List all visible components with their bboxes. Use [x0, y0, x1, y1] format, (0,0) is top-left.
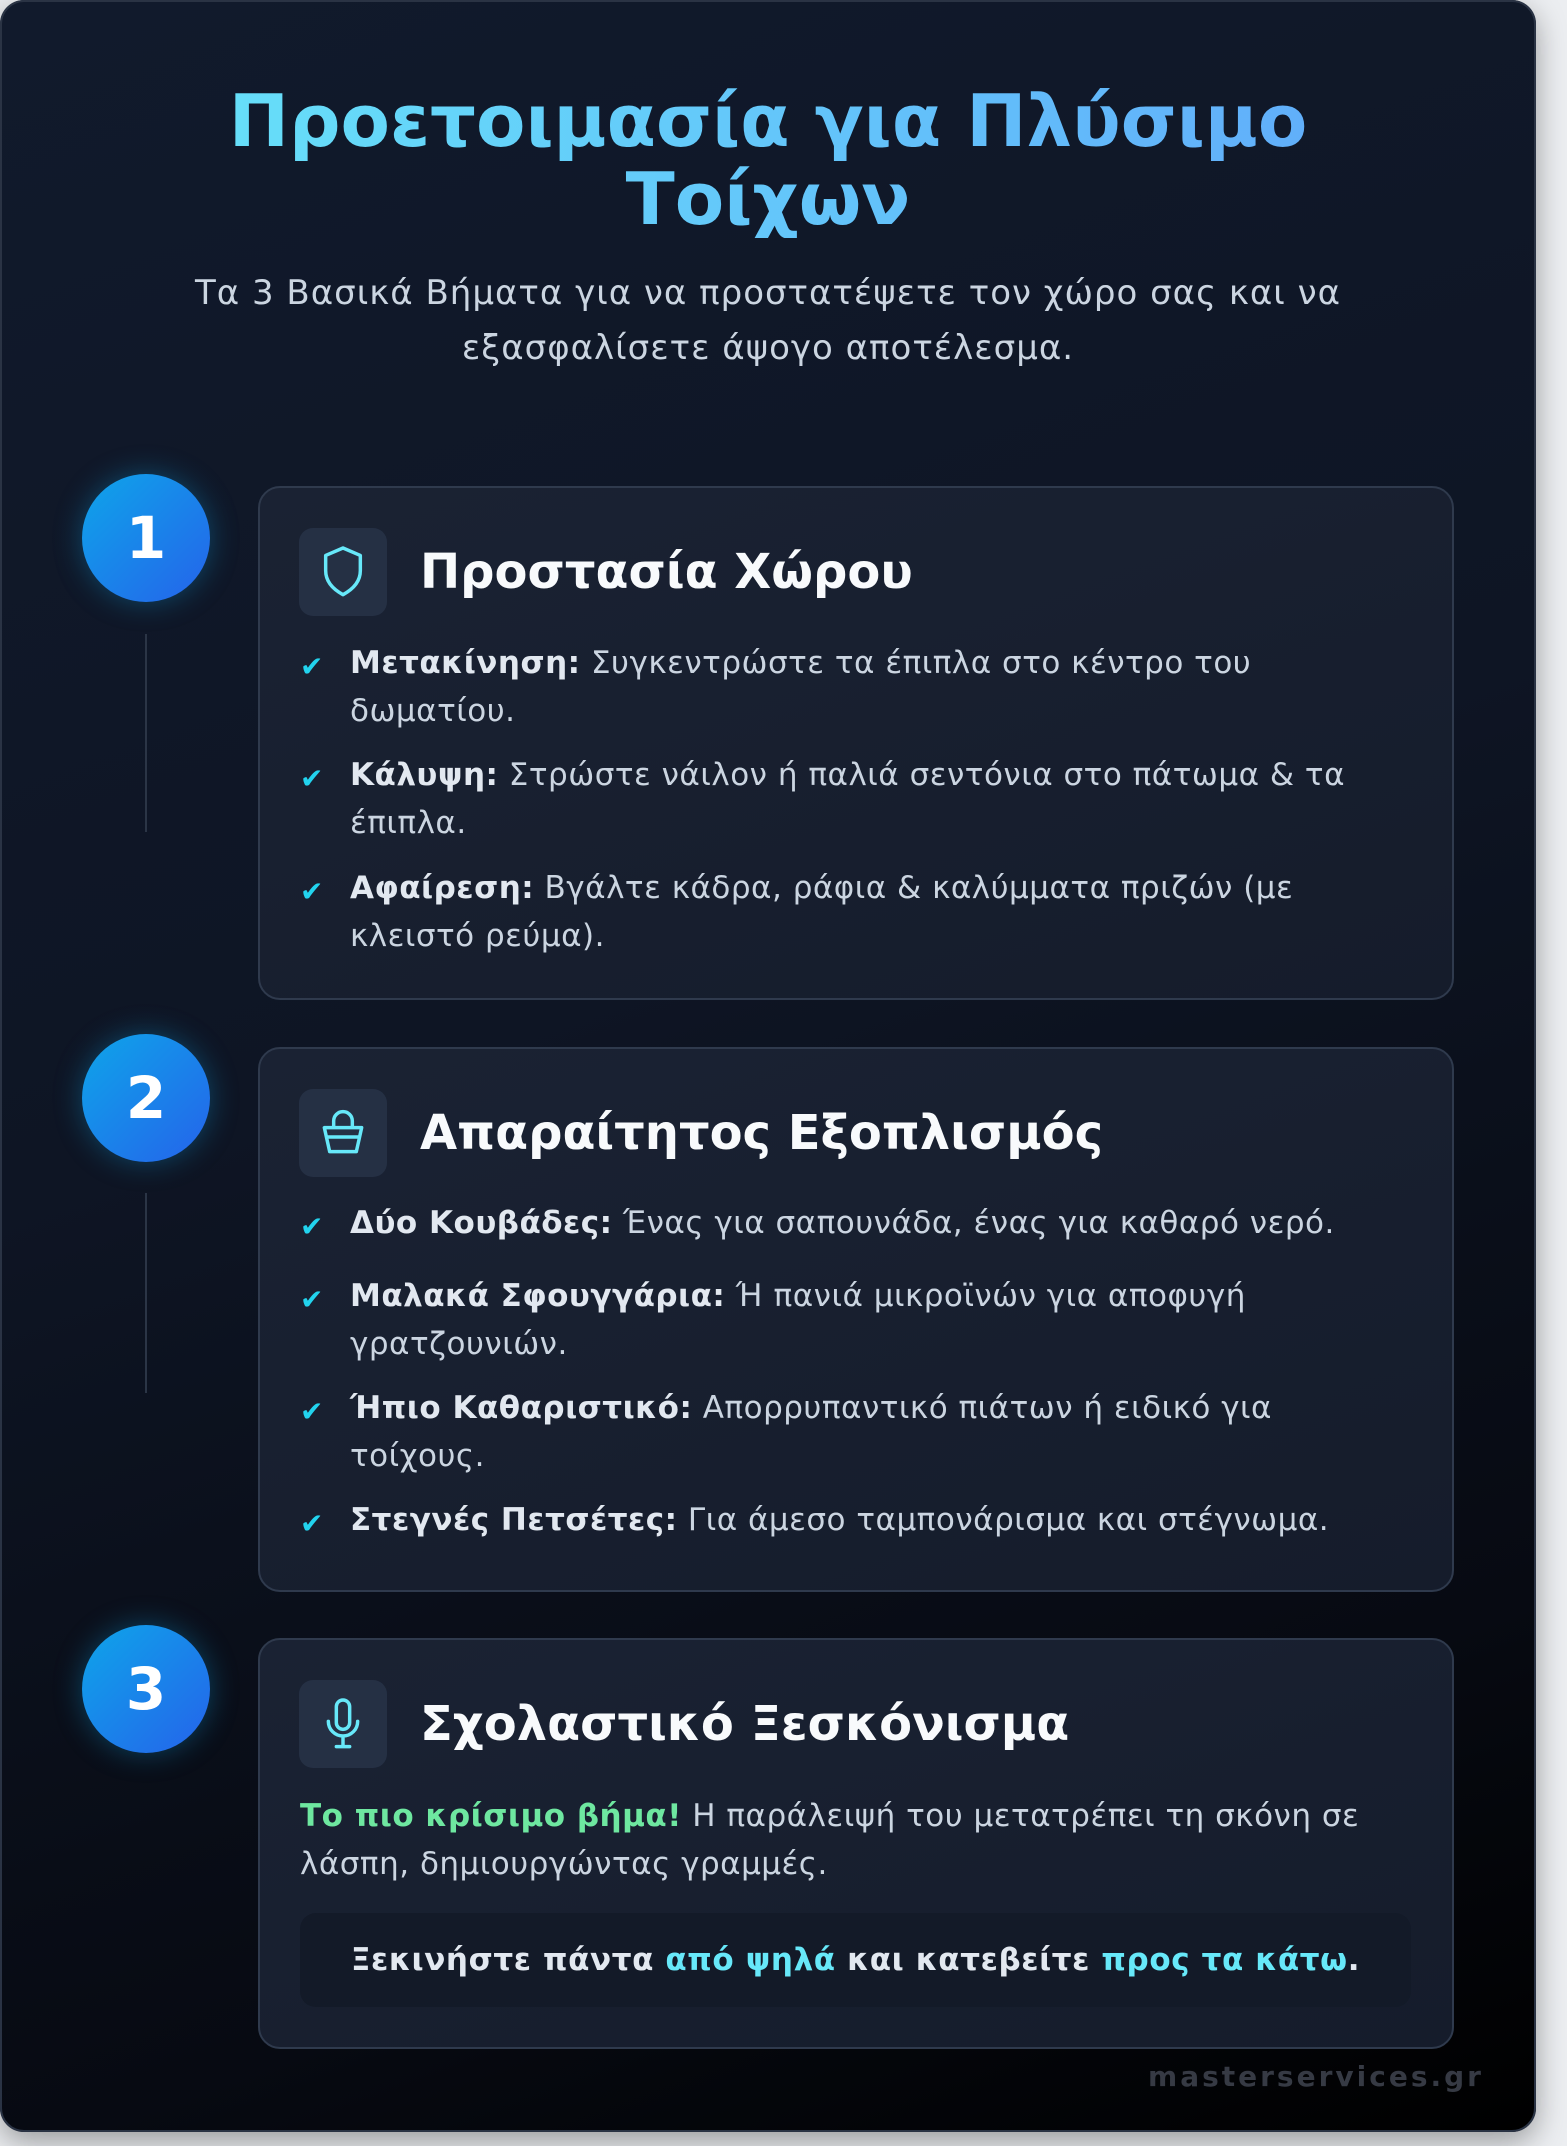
- bullet 3: Ήπιο Καθαριστικό: Απορρυπαντικό πιάτων ή ειδικό για τοίχους.: [350, 1390, 1272, 1474]
- bullet 2: Μαλακά Σφουγγάρια: Ή πανιά μικροϊνών για αποφυγή γρατζουνιών.: [350, 1278, 1246, 1362]
- paragraph: Το πιο κρίσιμο βήμα! Η παράλειψή του μετατρέπει τη σκόνη σε λάσπη, δημιουργώντας γραμμές.: [300, 1798, 1359, 1882]
- panel: protection: ✔: [300, 762, 323, 795]
- panel: equipment: [258, 1047, 1454, 1592]
- panel: equipment: ✔: [300, 1283, 323, 1316]
- bullet 2: Κάλυψη: Στρώστε νάιλον ή παλιά σεντόνια στο πάτωμα & τα έπιπλα.: [350, 757, 1345, 841]
- subtitle: εξασφαλίσετε άψογο αποτέλεσμα.: [462, 328, 1074, 368]
- callout: [300, 1913, 1411, 2007]
- panel: equipment: ✔: [300, 1507, 323, 1540]
- step 2 number: 2: [126, 1064, 166, 1132]
- step 1 number: 1: [126, 504, 166, 572]
- panel: protection: ✔: [300, 875, 323, 908]
- step 3 number: [82, 1625, 210, 1753]
- bullet 1: Δύο Κουβάδες: Ένας για σαπουνάδα, ένας για καθαρό νερό.: [350, 1205, 1335, 1241]
- step 3 number: 3: [126, 1655, 166, 1723]
- panel: protection: ✔: [300, 650, 323, 683]
- step 1 number: [82, 474, 210, 602]
- icon: basket: [299, 1089, 387, 1177]
- bullet 4: Στεγνές Πετσέτες: Για άμεσο ταμπονάρισμα και στέγνωμα.: [350, 1502, 1329, 1538]
- icon: microphone: [299, 1680, 387, 1768]
- connector 1: [145, 634, 147, 832]
- footer: masterservices.gr: [1148, 2060, 1484, 2093]
- icon: shield: [299, 528, 387, 616]
- panel: equipment: ✔: [300, 1395, 323, 1428]
- bullet 3: Αφαίρεση: Βγάλτε κάδρα, ράφια & καλύμματα πριζών (με κλειστό ρεύμα).: [350, 870, 1293, 954]
- panel: dusting: [258, 1638, 1454, 2049]
- callout: Ξεκινήστε πάντα από ψηλά και κατεβείτε προς τα κάτω.: [351, 1942, 1360, 1978]
- bullet 1: Μετακίνηση: Συγκεντρώστε τα έπιπλα στο κέντρο του δωματίου.: [350, 645, 1251, 729]
- heading: Σχολαστικό Ξεσκόνισμα: [420, 1696, 1069, 1752]
- subtitle: Τα 3 Βασικά Βήματα για να προστατέψετε τον χώρο σας και να: [195, 273, 1341, 313]
- title: [0, 82, 1536, 238]
- subtitle: [194, 273, 1341, 368]
- heading: Προστασία Χώρου: [420, 544, 913, 600]
- panel: protection: [258, 486, 1454, 1000]
- panel: equipment: ✔: [300, 1210, 323, 1243]
- title: Τοίχων: [626, 157, 910, 241]
- step 2 number: [82, 1034, 210, 1162]
- connector 2: [145, 1193, 147, 1393]
- title: Προετοιμασία για Πλύσιμο: [229, 79, 1307, 163]
- heading: Απαραίτητος Εξοπλισμός: [420, 1105, 1103, 1161]
